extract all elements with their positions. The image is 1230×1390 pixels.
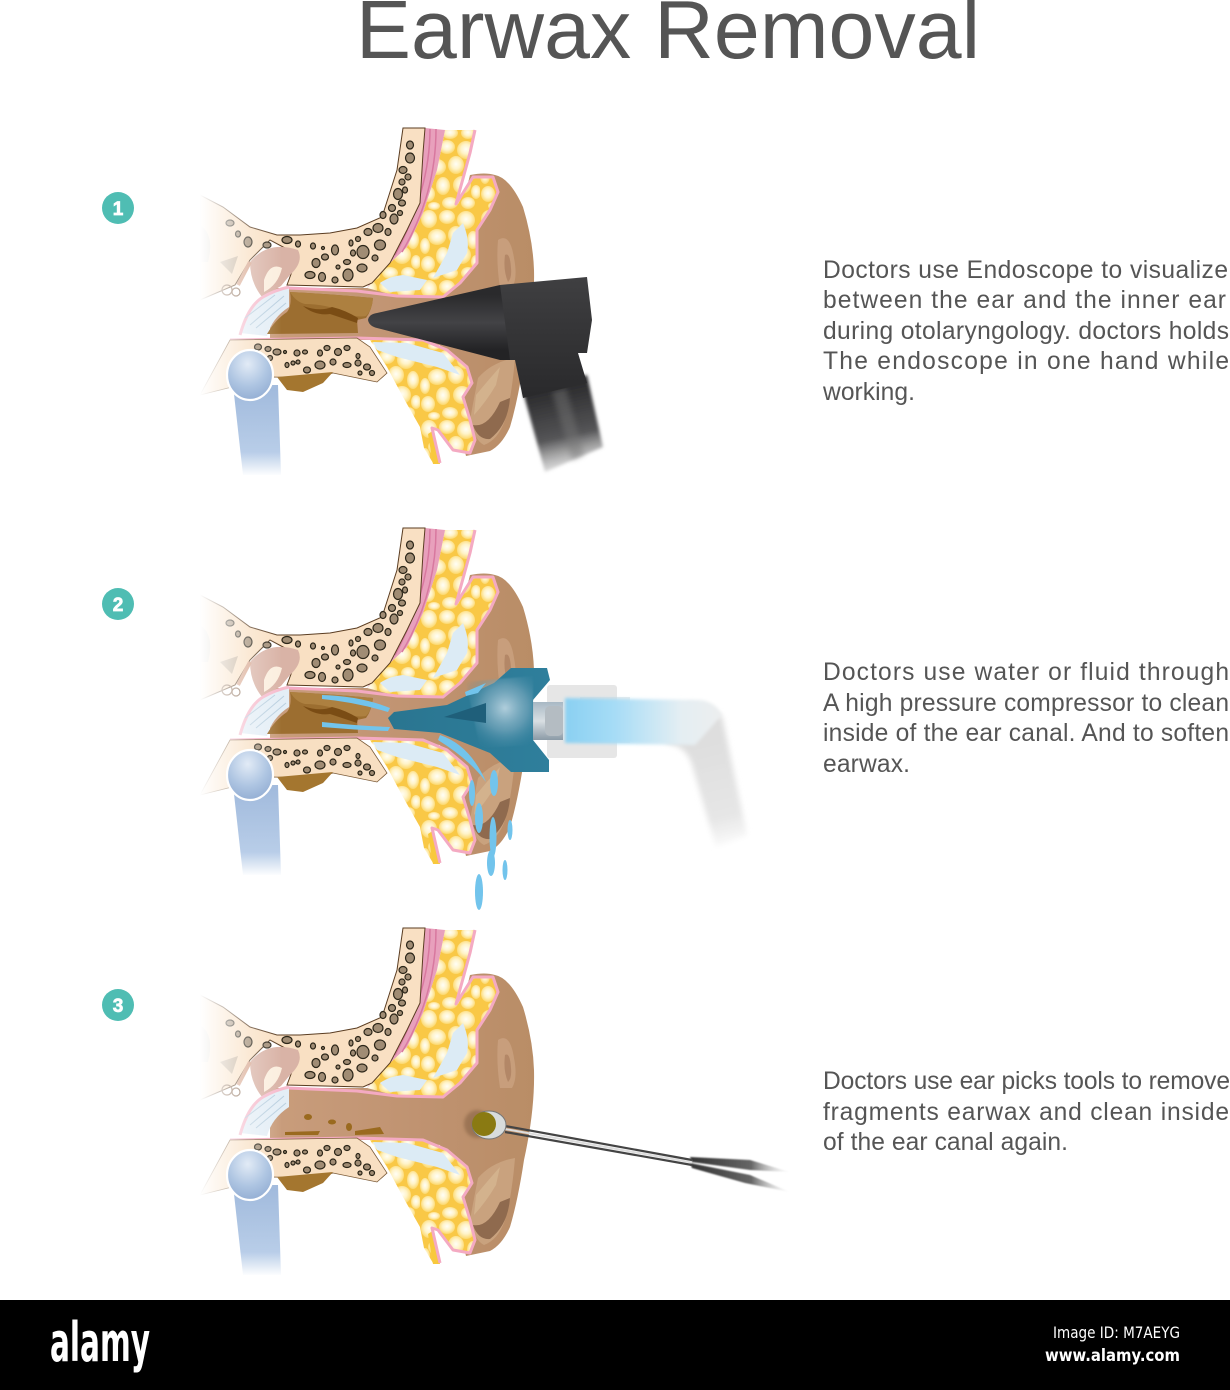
earwax plug [267,292,373,334]
text: step 3 description: Doctors use ear picks tools to remove [823,1068,1230,1095]
step badge 3 [102,989,134,1021]
website: www.alamy.com [1045,1346,1180,1366]
cartilage [373,1023,468,1175]
step badge 3: 3 [113,996,123,1017]
muscle strip [367,928,445,1088]
middle ear details [200,625,250,696]
text: step 1 description [822,257,1229,406]
blue tube [227,1150,281,1275]
outer ear skin [270,174,534,456]
icon: irrigator hose [529,685,747,847]
panel: ear with endoscope [190,128,603,475]
earwax fragments [285,1114,384,1135]
text: step 2 description [823,659,1229,778]
softened earwax [267,692,373,734]
eardrum [240,687,289,736]
cartilage [373,223,468,375]
icon: endoscope [368,277,603,472]
outer ear skin [270,574,534,856]
step badge 2: 2 [113,595,123,616]
text: step 1 description: between the ear and the inner ear [823,287,1226,314]
footer bar [0,1300,1230,1390]
muscle strip [367,128,445,288]
panel: ear with water irrigator [190,528,747,910]
middle ear details [200,225,250,296]
text: step 1 description: during otolaryngology. doctors holds [823,318,1229,345]
lower bone [200,1138,387,1195]
text: step 3 description: of the ear canal again. [823,1129,1068,1156]
text: step 3 description: fragments earwax and clean inside [823,1099,1229,1126]
step badge 1: 1 [113,199,124,220]
text: step 2 description: Doctors use water or fluid through [823,659,1229,686]
fat layer [230,530,498,864]
icon: irrigator nozzle [388,668,550,772]
alamy logo: alamy [50,1311,150,1374]
text: step 1 description: working. [822,379,915,406]
upper skull bone [200,528,425,700]
text: step 1 description: Doctors use Endoscope to visualize [823,257,1228,284]
upper skull bone [200,928,425,1100]
text: step 2 description: A high pressure compressor to clean [823,690,1229,717]
eardrum [240,1087,289,1136]
text: step 2 description: inside of the ear canal. And to soften [823,720,1229,747]
step badge 2 [102,588,134,620]
lower bone [200,338,387,395]
outer ear skin [270,974,534,1256]
image ID: Image ID: M7AEYG [1053,1323,1180,1342]
water jets and drops [322,683,512,910]
text: step 3 description [823,1068,1230,1156]
middle ear details [200,1025,250,1096]
eardrum [240,287,289,336]
blue tube [227,350,281,475]
step badge 1 [102,192,134,224]
panel: ear with ear pick [190,928,790,1275]
text: step 1 description: The endoscope in one hand while [823,348,1229,375]
blue tube [227,750,281,875]
fat layer [230,130,498,464]
fat layer [230,930,498,1264]
lower bone [200,738,387,795]
cartilage [373,623,468,775]
upper skull bone [200,128,425,300]
text: step 2 description: earwax. [823,751,910,778]
icon: ear pick [464,1110,790,1192]
muscle strip [367,528,445,688]
